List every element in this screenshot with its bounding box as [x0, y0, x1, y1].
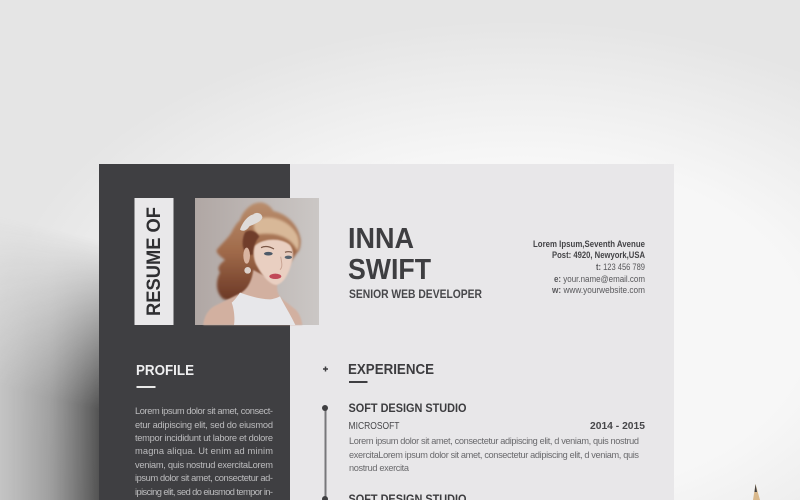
profile text	[135, 406, 273, 497]
job title: SENIOR WEB DEVELOPER	[349, 289, 483, 301]
profile text: magna aliqua. Ut enim ad minim	[135, 446, 273, 456]
name heading: INNA	[348, 223, 414, 255]
contact details: Lorem Ipsum,Seventh Avenue	[533, 239, 645, 249]
nose shadow	[280, 257, 282, 270]
profile text: ipiscing elit, sed do eiusmod tempor in-	[135, 487, 273, 497]
face	[254, 240, 293, 285]
white dress	[232, 293, 295, 325]
contact details	[533, 239, 645, 295]
paper sheet	[290, 164, 674, 500]
profile text: Lorem ipsum dolor sit amet, consect-	[135, 406, 273, 416]
contact details: e: your.name@email.com	[554, 274, 645, 284]
experience entry 1: nostrud exercita	[349, 463, 410, 473]
experience entry 1: SOFT DESIGN STUDIO	[348, 403, 467, 415]
portrait photo	[195, 198, 319, 325]
name heading: SWIFT	[348, 254, 431, 286]
pencil tip	[753, 484, 760, 500]
experience entry 1: Lorem ipsum dolor sit amet, consectetur adipiscing elit, d veniam, quis nostrud	[349, 436, 639, 446]
experience entry 1: MICROSOFT	[348, 421, 400, 432]
ear	[243, 248, 250, 264]
vertical title: resume of: RESUME OF	[144, 207, 165, 316]
name heading	[348, 223, 431, 286]
experience entry 1: exercitaLorem ipsum dolor sit amet, consectetur adipiscing elit, d veniam, quis	[349, 450, 639, 460]
experience entry 1	[348, 403, 645, 473]
dark inner hair	[243, 231, 259, 255]
dark sidebar	[99, 164, 290, 500]
hair clip	[240, 213, 262, 231]
hair	[217, 202, 301, 300]
hair highlight	[254, 217, 299, 251]
vertical title: resume of	[134, 198, 174, 325]
profile text: etur adipiscing elit, sed do eiusmod	[135, 420, 273, 430]
contact details: Post: 4920, Newyork,USA	[552, 250, 645, 260]
earring	[244, 267, 251, 274]
profile text: tempor incididunt ut labore et dolore	[135, 433, 273, 443]
profile heading	[136, 363, 194, 388]
paper shadow	[0, 246, 99, 500]
contact details: w: www.yourwebsite.com	[551, 285, 645, 295]
neck and shoulders	[203, 270, 302, 325]
experience heading: EXPERIENCE	[348, 362, 434, 378]
profile text: veniam, quis nostrud exercitaLorem	[135, 460, 273, 470]
timeline	[322, 366, 328, 500]
lips	[269, 274, 281, 279]
contact details: t: 123 456 789	[596, 262, 645, 272]
experience entry 1: 2014 - 2015	[590, 420, 645, 432]
profile text: ipsum dolor sit amet, consectetur ad-	[135, 473, 273, 483]
profile heading: PROFILE	[136, 363, 194, 379]
eyes and brows	[261, 247, 292, 252]
